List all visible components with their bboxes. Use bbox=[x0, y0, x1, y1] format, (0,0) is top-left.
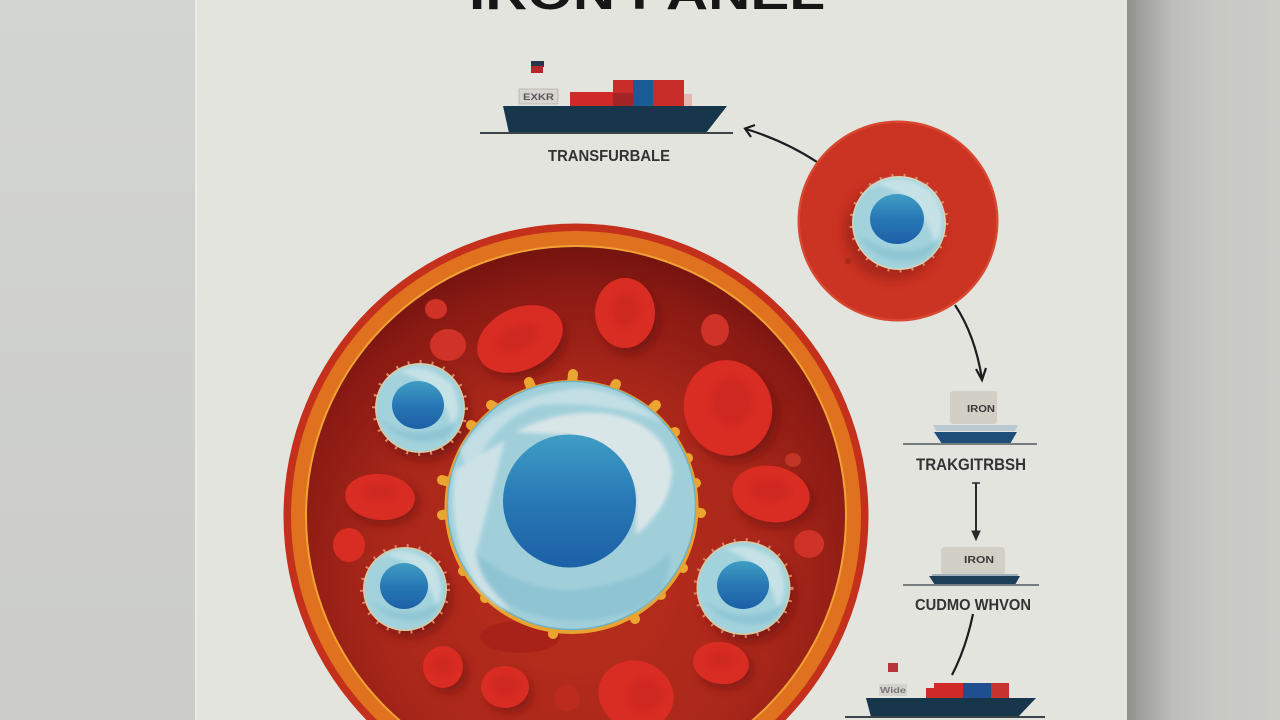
arrow: step one to step two bbox=[972, 483, 980, 540]
icon: iron step one: IRON bbox=[967, 404, 995, 415]
icon: white blood cell bbox=[852, 176, 946, 270]
icon: central large cell bbox=[442, 374, 701, 634]
icon: iron step one bbox=[903, 391, 1037, 445]
yellow spikes bbox=[442, 374, 701, 634]
arrow: red cell to iron step one bbox=[955, 305, 986, 380]
small red circle with cell bbox=[798, 120, 998, 322]
icon: lower-right white cell bbox=[696, 540, 792, 636]
icon: bottom cargo ship: Wide bbox=[880, 686, 907, 695]
red cell dimples bbox=[364, 293, 789, 712]
label: transfurbale: TRANSFURBALE bbox=[548, 148, 670, 165]
icon: iron step two bbox=[903, 547, 1039, 586]
arrow: red cell to top ship bbox=[745, 125, 817, 162]
arrow: step two to bottom ship bbox=[952, 614, 973, 675]
nucleus bbox=[503, 434, 636, 568]
cell highlights bbox=[453, 388, 672, 621]
icon: top cargo ship bbox=[480, 61, 733, 134]
icon: bottom cargo ship bbox=[845, 663, 1045, 718]
icon: lower-left white cell bbox=[362, 546, 448, 632]
icon: iron step two: IRON bbox=[964, 555, 994, 566]
label: trakgitrbsh: TRAKGITRBSH bbox=[916, 455, 1026, 474]
panel: large blood vessel cross-section bbox=[284, 224, 868, 720]
icon: top cargo ship: EXKR bbox=[523, 92, 555, 102]
cell shadows bbox=[352, 286, 813, 712]
label: cudmo whvon: CUDMO WHVON bbox=[915, 597, 1031, 614]
icon: upper-left white cell bbox=[374, 362, 466, 454]
poster sheet bbox=[195, 0, 1127, 720]
red blood cells bbox=[333, 278, 824, 720]
